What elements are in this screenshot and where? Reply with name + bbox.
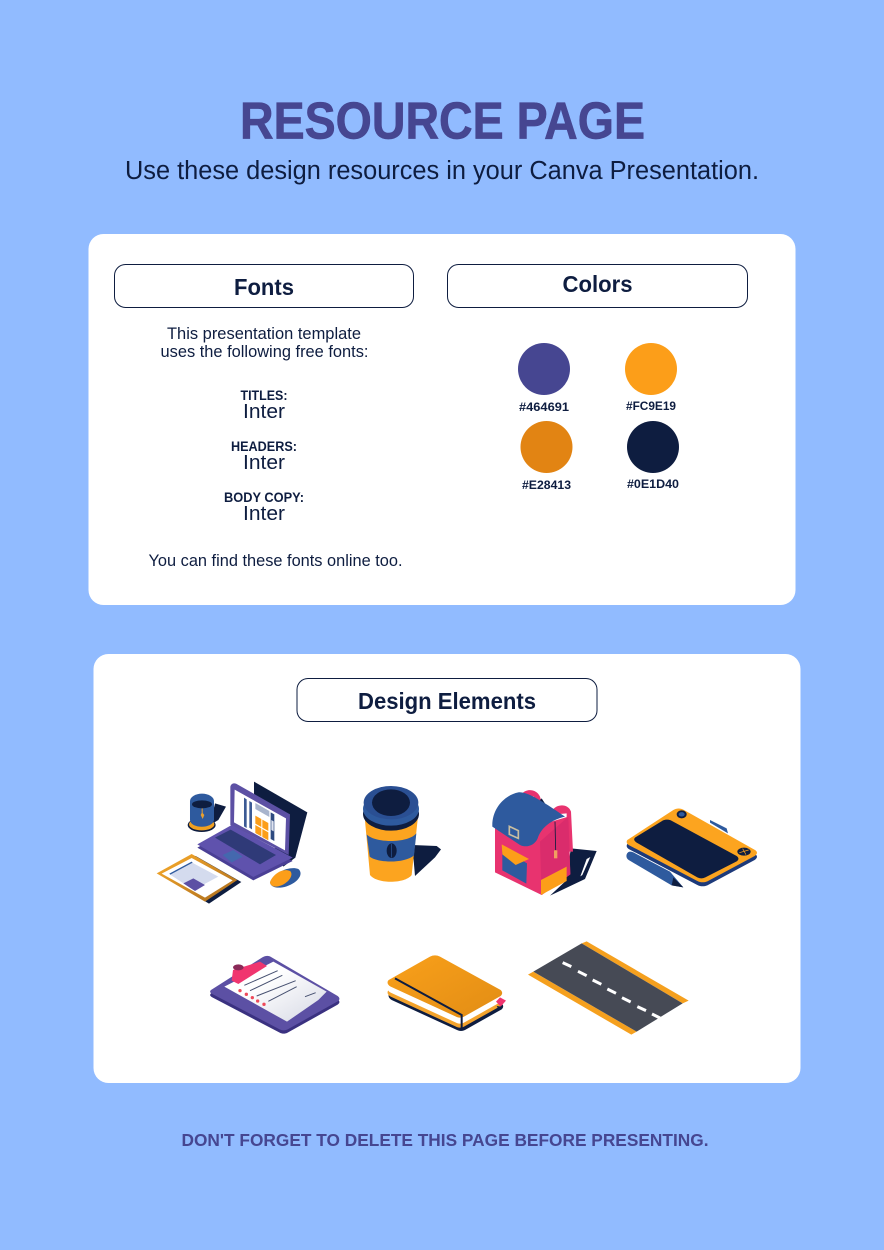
font list: Inter xyxy=(243,452,285,474)
footer reminder: DON'T FORGET TO DELETE THIS PAGE BEFORE PRESENTING. xyxy=(182,1130,708,1150)
panel: design elements xyxy=(94,654,800,1083)
fonts intro text xyxy=(160,325,368,361)
icon: clipboard xyxy=(210,956,339,1034)
subtitle: Use these design resources in your Canva Presentation. xyxy=(125,157,759,185)
icon: graphics tablet and stylus xyxy=(626,808,757,887)
icon: coffee cup xyxy=(363,786,441,882)
font list: Inter xyxy=(243,503,285,525)
design elements heading: Design Elements xyxy=(358,688,536,714)
colors heading xyxy=(448,264,748,308)
fonts note: You can find these fonts online too. xyxy=(148,552,402,570)
swatch: #0E1D40: #0E1D40 xyxy=(627,477,679,491)
design elements heading xyxy=(297,678,597,722)
icon: backpack xyxy=(492,790,597,896)
swatch: #464691 xyxy=(518,343,570,414)
font list: HEADERS: xyxy=(231,439,297,454)
font list xyxy=(224,388,304,525)
fonts intro text: This presentation template xyxy=(167,325,361,343)
font list: TITLES: xyxy=(240,388,288,403)
colors heading: Colors xyxy=(562,271,632,297)
swatch: #464691: #464691 xyxy=(519,400,569,414)
swatch: #E28413: #E28413 xyxy=(522,478,571,492)
font list: Inter xyxy=(243,401,285,423)
swatch: #0E1D40 xyxy=(627,421,679,491)
icon: notebook xyxy=(388,955,506,1031)
fonts intro text: uses the following free fonts: xyxy=(160,343,368,361)
icon: road xyxy=(528,941,689,1035)
fonts heading xyxy=(114,264,414,308)
title: RESOURCE PAGE xyxy=(240,92,645,150)
panel: fonts and colors xyxy=(88,234,796,605)
fonts heading: Fonts xyxy=(234,274,294,300)
swatch: #E28413 xyxy=(520,421,572,492)
swatch: #FC9E19: #FC9E19 xyxy=(626,399,676,413)
font list: BODY COPY: xyxy=(224,490,304,505)
swatch: #FC9E19 xyxy=(625,343,677,413)
icon: laptop, mug, tablet and mouse xyxy=(157,782,307,904)
